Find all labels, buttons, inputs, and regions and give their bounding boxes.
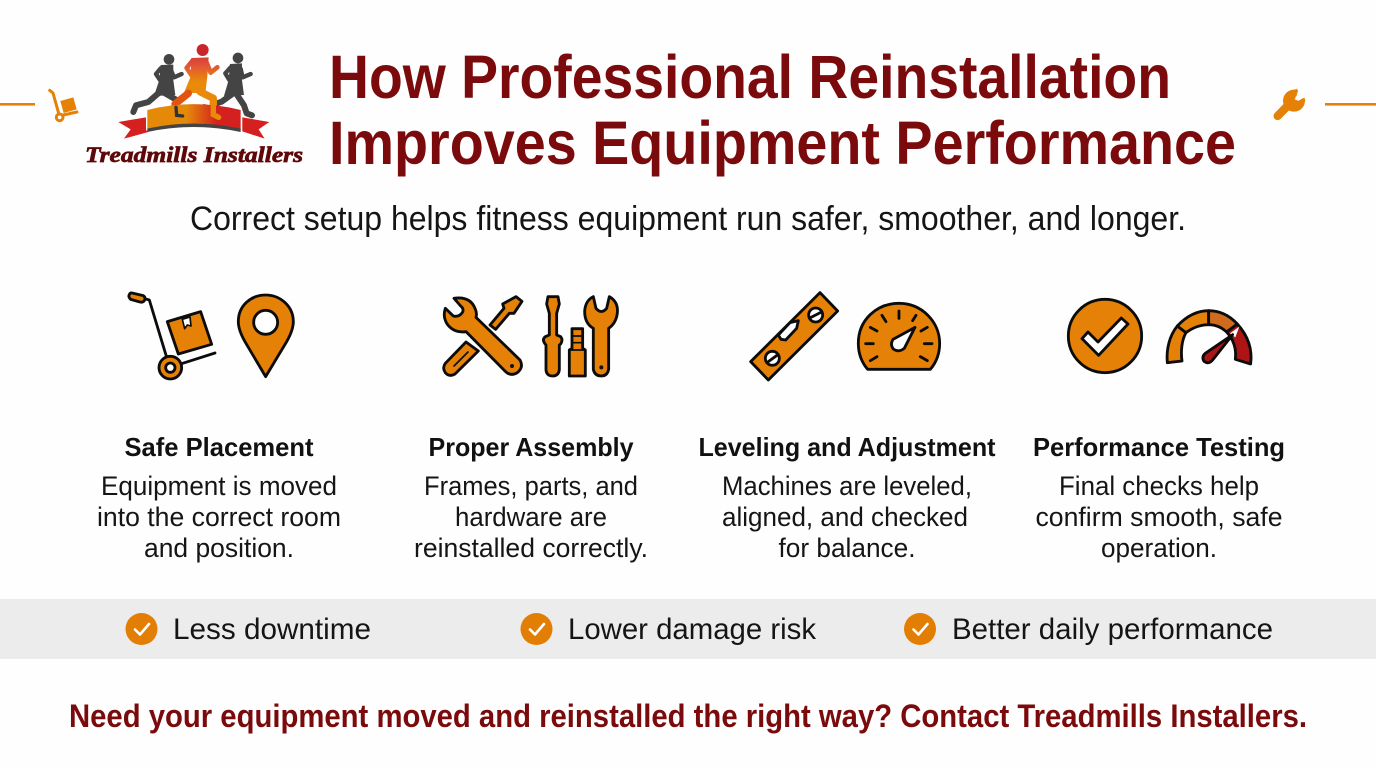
- icon: small wrench: [1278, 88, 1309, 116]
- icon: dial gauge: [858, 303, 940, 369]
- title: Improves Equipment Performance: [329, 109, 1236, 177]
- icon: crossed wrench: [444, 298, 521, 374]
- icon group: hand truck and map pin: [129, 293, 293, 379]
- logo banner: [118, 104, 269, 139]
- logo: Treadmills Installers: [85, 44, 303, 167]
- column: Proper Assembly: hardware are: [455, 502, 607, 532]
- icon: speedometer: [1167, 311, 1251, 364]
- column: Performance Testing: Final checks help: [1059, 471, 1259, 501]
- column: Safe Placement: Equipment is moved: [101, 471, 337, 501]
- title: How Professional Reinstallation: [329, 43, 1171, 111]
- icon group: check badge and speedometer: [1068, 299, 1251, 373]
- benefits band: [0, 599, 1376, 659]
- logo runners: [133, 44, 252, 118]
- decorative right line with wrench icon: [1278, 88, 1376, 116]
- icon: upright open wrench: [585, 297, 617, 376]
- column: Performance Testing: confirm smooth, safe: [1036, 502, 1282, 532]
- column: Leveling and Adjustment: [698, 432, 996, 563]
- column: Performance Testing: Performance Testing: [1033, 432, 1285, 462]
- column: Proper Assembly: reinstalled correctly.: [414, 533, 648, 563]
- column: Safe Placement: [97, 432, 341, 563]
- column: Safe Placement: and position.: [144, 533, 294, 563]
- icon: spirit level: [751, 293, 838, 380]
- benefit: Lower damage risk: Lower damage risk: [568, 613, 817, 646]
- column: Leveling and Adjustment: Machines are leveled,: [722, 471, 972, 501]
- column: Performance Testing: [1033, 432, 1285, 563]
- icon: small hand cart: [50, 90, 77, 121]
- decorative left line with cart icon: [0, 90, 77, 121]
- subtitle: Correct setup helps fitness equipment run safer, smoother, and longer.: [190, 200, 1186, 238]
- column: Leveling and Adjustment: aligned, and checked: [722, 502, 968, 532]
- icon: upright screwdriver: [543, 297, 562, 376]
- column: Safe Placement: into the correct room: [97, 502, 341, 532]
- icon group: spirit level and dial gauge: [751, 293, 940, 380]
- title: [329, 43, 1236, 177]
- icon: check badge: [1068, 299, 1142, 373]
- benefit: Less downtime: Less downtime: [173, 613, 371, 646]
- icon group: wrench, screwdriver and tools: [444, 297, 617, 376]
- icon: socket bit: [569, 329, 585, 376]
- column: Leveling and Adjustment: Leveling and Adjustment: [698, 432, 996, 462]
- column: Safe Placement: Safe Placement: [124, 432, 314, 462]
- icon: hand truck: [129, 293, 215, 379]
- logo wordmark: Treadmills Installers: [85, 142, 303, 167]
- benefit: Better daily performance: Better daily performance: [952, 613, 1273, 646]
- column: Leveling and Adjustment: for balance.: [778, 533, 916, 563]
- column: Performance Testing: operation.: [1101, 533, 1217, 563]
- column: Proper Assembly: Frames, parts, and: [424, 471, 638, 501]
- icon: crossed screwdriver: [444, 297, 522, 375]
- column: Proper Assembly: [414, 432, 648, 563]
- column: Proper Assembly: Proper Assembly: [428, 432, 634, 462]
- icon: map pin: [238, 295, 293, 377]
